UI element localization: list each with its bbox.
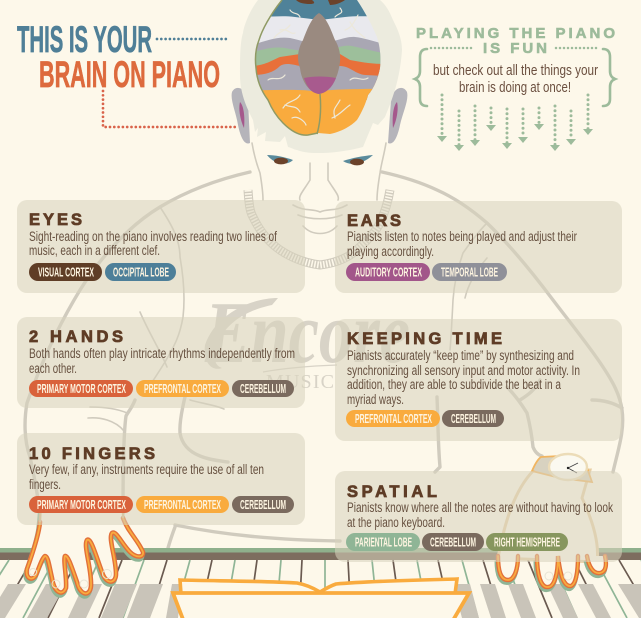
tag: cerebellum: CEREBELLUM (430, 536, 476, 550)
text: ears description (347, 229, 577, 259)
tag: cerebellum: CEREBELLUM (240, 498, 286, 512)
heading: keeping time: KEEPING TIME (347, 330, 502, 348)
panel: 2 hands (17, 317, 305, 408)
callout: playing the piano is fun: IS FUN (483, 40, 547, 57)
tag: right hemisphere: RIGHT HEMISPHERE (494, 536, 560, 550)
icon: left ear (232, 88, 250, 144)
text: 10 fingers description: fingers. (29, 477, 61, 492)
text: 2 hands description (29, 346, 295, 376)
left hand (26, 500, 143, 596)
text: 2 hands description: Both hands often play intricate rhythms independently from (29, 346, 295, 361)
watermark: Encore Music: Encore (204, 285, 410, 382)
tag: visual cortex: VISUAL CORTEX (38, 266, 94, 280)
dotted arrows (437, 95, 593, 151)
tag: prefrontal cortex (136, 380, 229, 397)
title: THIS IS YOUR (17, 19, 152, 60)
eye: left (267, 155, 293, 164)
text: eyes description (29, 229, 277, 258)
callout: playing the piano is fun: brain is doing at once! (459, 79, 571, 96)
dotted connector: title to ear (103, 91, 238, 127)
brain region: central cerebellum (298, 13, 340, 94)
tag: primary motor cortex: PRIMARY MOTOR CORTEX (37, 382, 126, 396)
brain (254, 0, 380, 136)
tag: temporal lobe (432, 263, 507, 281)
brain region: temporal gray upper (256, 36, 380, 76)
tag: prefrontal cortex: PREFRONTAL CORTEX (355, 412, 432, 426)
heading: 10 fingers: 10 FINGERS (29, 445, 155, 463)
tag: prefrontal cortex: PREFRONTAL CORTEX (144, 498, 221, 512)
fingers: right hand (497, 556, 606, 590)
tag: primary motor cortex: PRIMARY MOTOR CORTEX (37, 498, 126, 512)
tag: occipital lobe (105, 263, 176, 281)
tag: cerebellum (232, 380, 294, 397)
tag: parietal lobe: PARIENTAL LOBE (355, 536, 412, 550)
icon: wristwatch (532, 454, 592, 482)
text: eyes description: Sight-reading on the piano involves reading two lines of (29, 229, 277, 244)
tag: temporal lobe: TEMPORAL LOBE (441, 266, 498, 280)
tag: parietal lobe (346, 533, 420, 551)
tag: cerebellum (232, 496, 294, 513)
text: ears description: playing accordingly. (347, 244, 434, 259)
text: spatial description: at the piano keyboard. (347, 515, 445, 530)
tag: prefrontal cortex (346, 410, 440, 427)
tag: right hemisphere (486, 533, 568, 551)
icon: right ear (388, 88, 407, 144)
brain region: occipital lobe (271, 0, 367, 20)
open book (173, 579, 469, 618)
text: 10 fingers description: Very few, if any, instruments require the use of all ten (29, 462, 264, 477)
collar (248, 190, 390, 265)
face (252, 130, 386, 243)
brain region: orange motor (250, 54, 385, 100)
tag: occipital lobe: OCCIPITAL LOBE (113, 266, 169, 280)
panel: spatial (335, 471, 622, 562)
text: 2 hands description: each other. (29, 361, 77, 376)
right hand with watch (497, 454, 606, 590)
panel: ears (335, 201, 622, 293)
eye: right (343, 155, 373, 165)
body outline: shirt and arms (25, 172, 623, 548)
heading: eyes: EYES (29, 211, 82, 229)
dotted connector: title to brain (157, 38, 230, 40)
brain: top brown (296, 0, 345, 5)
panel: eyes (17, 200, 305, 293)
piano keyboard (0, 548, 641, 618)
tag: primary motor cortex (29, 496, 133, 513)
callout: playing the piano is fun (415, 25, 615, 106)
tag: auditory cortex: AUDITORY CORTEX (355, 266, 422, 280)
panel: 10 fingers (17, 433, 305, 525)
brain region: gray lower (258, 64, 378, 100)
text: keeping time description: myriad ways. (347, 392, 404, 407)
tag: cerebellum: CEREBELLUM (451, 412, 496, 426)
tag: primary motor cortex (29, 380, 133, 397)
tag: cerebellum: CEREBELLUM (240, 382, 286, 396)
tag: prefrontal cortex: PREFRONTAL CORTEX (144, 382, 221, 396)
tag: cerebellum (442, 410, 504, 427)
text: keeping time description: addition, they are able to subdivide the beat in a (347, 377, 561, 392)
text: keeping time description (347, 348, 580, 407)
panel: keeping time (335, 319, 622, 441)
brain region: prefrontal cortex (262, 88, 372, 134)
text: 10 fingers description (29, 462, 264, 492)
tag: auditory cortex (346, 263, 430, 281)
callout: playing the piano is fun: PLAYING THE PIANO (416, 25, 615, 42)
brain region: green (256, 46, 380, 88)
heading: 2 hands: 2 HANDS (29, 328, 123, 346)
hair (240, 0, 402, 153)
brain region: auditory cortex (304, 76, 336, 94)
heading: spatial: SPATIAL (347, 483, 437, 501)
callout: playing the piano is fun: but check out all the things your (433, 62, 598, 79)
tag: visual cortex (29, 263, 102, 281)
tag: cerebellum (422, 533, 484, 551)
tag: prefrontal cortex (136, 496, 229, 513)
text: eyes description: music, each in a different clef. (29, 243, 160, 258)
title: BRAIN ON PIANO (39, 54, 220, 95)
title (17, 19, 220, 95)
text: spatial description (347, 500, 613, 530)
heading: ears: EARS (347, 212, 401, 230)
watermark: Encore Music: MUSIC (266, 371, 334, 393)
